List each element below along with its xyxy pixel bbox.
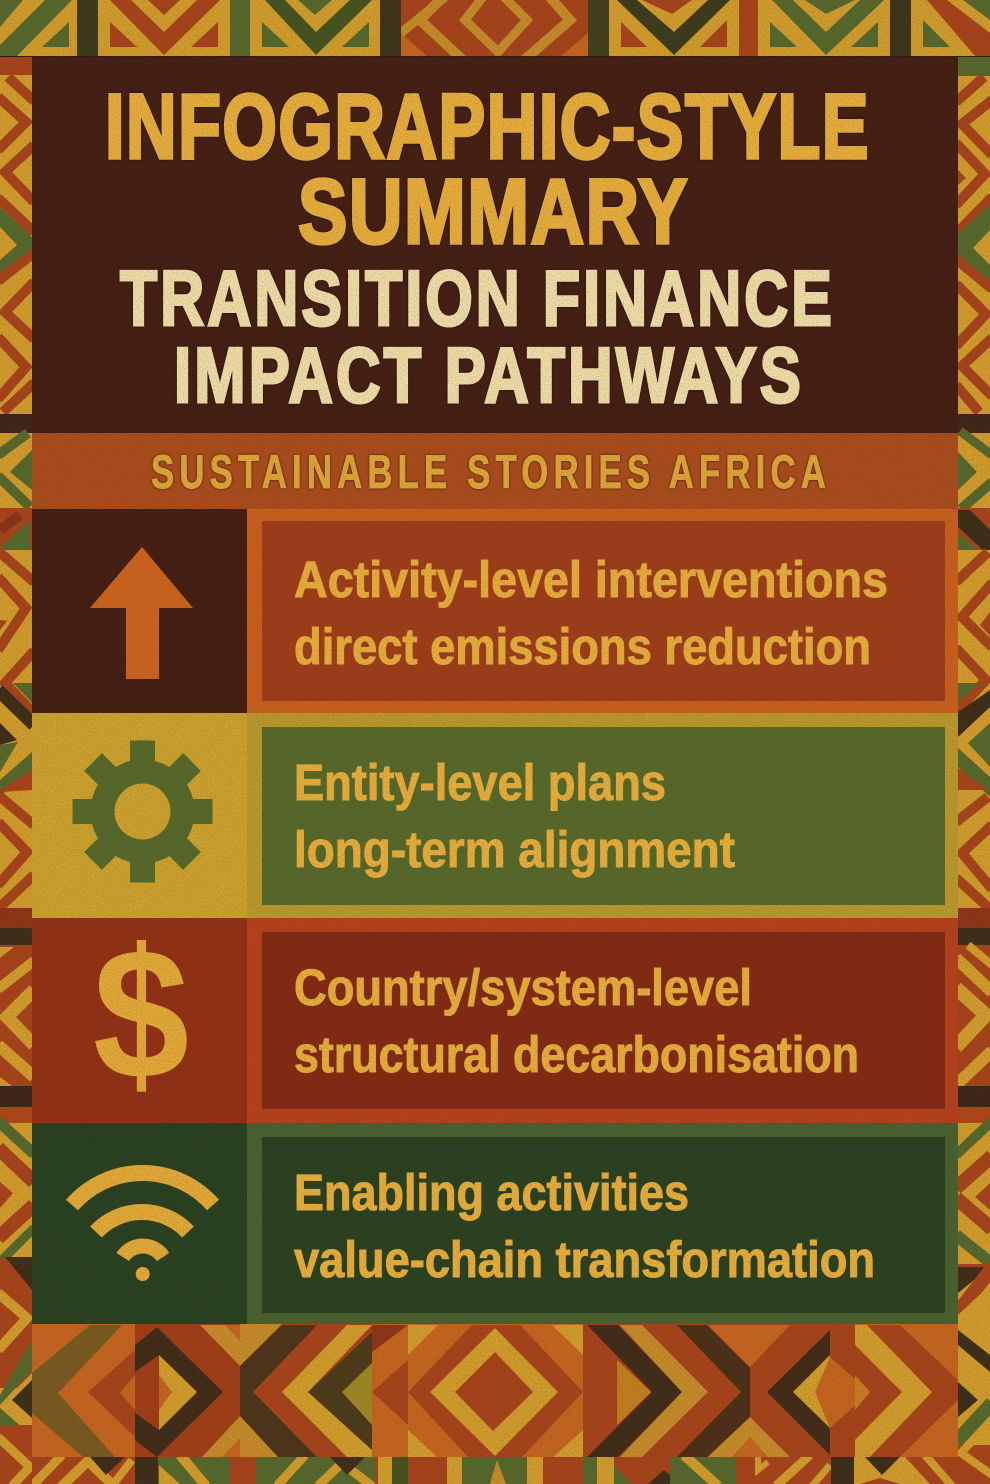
- icon: gear: [72, 740, 212, 882]
- text: entity-level: [294, 754, 735, 878]
- row: country/system-level: [32, 910, 958, 1123]
- text: entity-level: long-term alignment: [294, 821, 735, 878]
- row: entity-level plans: [32, 713, 958, 918]
- text: country/system-level: [294, 959, 859, 1083]
- panel: title: [32, 57, 958, 432]
- icon: wifi signal: [72, 1173, 213, 1281]
- row: enabling activities: [32, 1123, 958, 1324]
- title: infographic-style summary: SUMMARY: [298, 161, 689, 263]
- text: activity-level: [294, 551, 888, 675]
- title: infographic-style summary: [105, 76, 870, 263]
- text: enabling activities: value-chain transformation: [294, 1231, 875, 1288]
- row: activity-level interventions: [32, 509, 958, 713]
- text: activity-level: direct emissions reduction: [294, 618, 871, 675]
- subtitle: transition finance impact pathways: IMPACT PATHWAYS: [174, 331, 804, 419]
- left pattern border: [0, 57, 34, 1484]
- icon: up arrow: [90, 547, 193, 679]
- band: sustainable stories africa: [32, 433, 958, 509]
- text: entity-level: Entity-level plans: [294, 754, 666, 811]
- top pattern border: [0, 0, 990, 62]
- right pattern border: [956, 57, 990, 1484]
- icon: dollar sign: $: [93, 910, 189, 1118]
- text: activity-level: Activity-level interventions: [294, 551, 888, 608]
- subtitle: transition finance impact pathways: [120, 254, 835, 419]
- text: country/system-level: structural decarbonisation: [294, 1026, 859, 1083]
- text: enabling activities: Enabling activities: [294, 1164, 689, 1221]
- bottom pattern strip: [32, 1455, 958, 1484]
- text: enabling activities: [294, 1164, 875, 1288]
- text: country/system-level: Country/system-level: [294, 959, 752, 1016]
- bottom pattern panel: [32, 1324, 958, 1457]
